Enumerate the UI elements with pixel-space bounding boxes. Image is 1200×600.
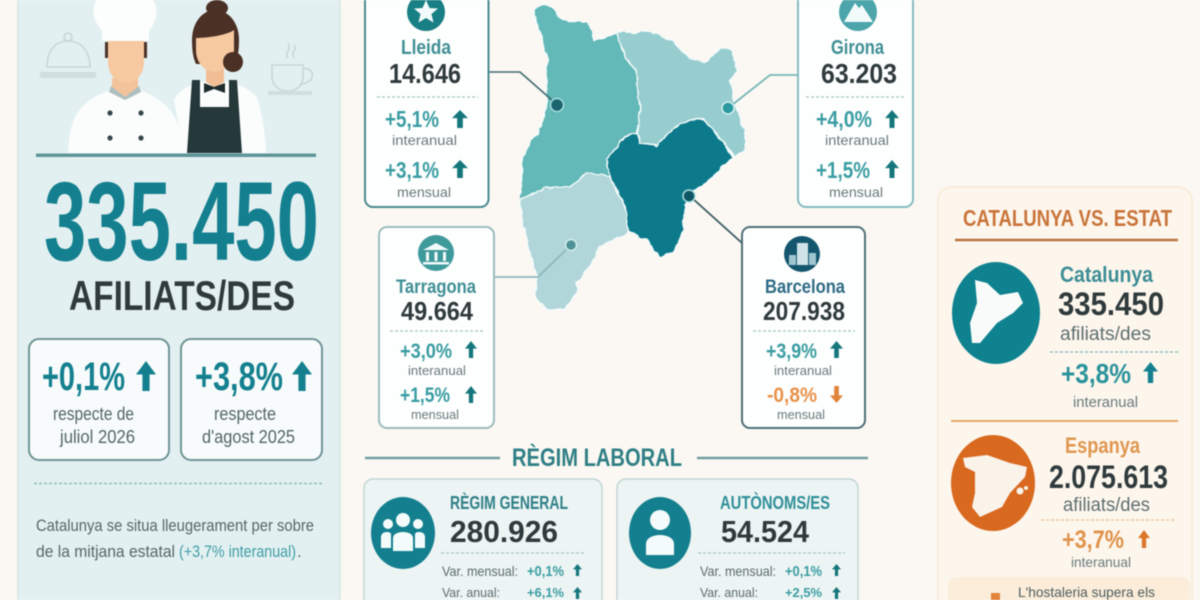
- subtitle: AFILIATS/DES: [69, 272, 295, 319]
- card: Tarragona: 49.664: [401, 296, 473, 326]
- stats: Espanya: [1041, 433, 1176, 570]
- card: Autònoms: Var. anual:: [700, 585, 758, 600]
- stats: Catalunya: Catalunya: [1060, 262, 1154, 287]
- stats: Espanya: 2.075.613: [1049, 459, 1168, 495]
- card: monthly change: [29, 339, 169, 460]
- panel: total afiliats: [18, 0, 340, 600]
- card: monthly change: +0,1%: [42, 355, 125, 399]
- card: Lleida: Lleida: [401, 37, 452, 59]
- connector: Girona: [722, 75, 798, 114]
- card: Autònoms: AUTÒNOMS/ES: [720, 492, 830, 513]
- stats: Catalunya: afiliats/des: [1060, 324, 1151, 345]
- card: Autònoms: 54.524: [721, 514, 810, 549]
- stats: Catalunya: +3,8%: [1061, 358, 1131, 389]
- icon: mountain: [839, 0, 877, 31]
- card: Barcelona: -0,8%: [767, 384, 817, 407]
- card: annual change: [181, 339, 322, 460]
- card: Lleida: 14.646: [389, 58, 461, 89]
- card: Barcelona: Barcelona: [765, 277, 845, 298]
- card: annual change: respecte: [214, 404, 276, 424]
- region: Girona: [617, 32, 745, 157]
- card: monthly change: respecte de: [53, 404, 134, 424]
- note text: [36, 516, 314, 561]
- card: Tarragona: mensual: [411, 407, 459, 422]
- card: Autònoms: +2,5%: [785, 585, 822, 600]
- card: Règim general: 280.926: [450, 514, 558, 549]
- card: Lleida: [365, 0, 488, 207]
- card: Girona: [798, 0, 913, 207]
- callout: [948, 577, 1190, 600]
- icon: group of people: [371, 497, 435, 569]
- card: Barcelona: mensual: [777, 407, 825, 422]
- stats: Espanya: afiliats/des: [1063, 495, 1150, 516]
- illustration: chef: [68, 0, 185, 153]
- card: Girona: 63.203: [821, 58, 897, 89]
- card: Tarragona: +3,0%: [400, 340, 452, 363]
- card: Barcelona: interanual: [774, 363, 832, 378]
- card: Barcelona: [742, 227, 865, 428]
- card: Règim general: Var. mensual:: [442, 563, 518, 579]
- map of Catalonia: [520, 4, 745, 310]
- card: Règim general: +0,1%: [527, 563, 564, 580]
- card: Girona: +4,0%: [816, 106, 872, 132]
- icon: cloche: [40, 33, 96, 78]
- icon: coffee cup: [268, 43, 312, 95]
- card: annual change: d'agost 2025: [202, 427, 295, 447]
- illustration: waitress: [174, 0, 266, 153]
- region: Tarragona: [520, 173, 628, 310]
- icon: Catalonia map: [952, 262, 1040, 364]
- card: Tarragona: +1,5%: [400, 384, 450, 407]
- card: Lleida: +5,1%: [385, 106, 439, 132]
- stats: Catalunya: [1050, 262, 1178, 411]
- card: Autònoms: +0,1%: [785, 563, 822, 580]
- icon: star: [407, 0, 445, 31]
- card: Lleida: interanual: [392, 132, 457, 148]
- connector: Barcelona: [683, 190, 742, 243]
- note text: de la mitjana estatal: [36, 542, 175, 561]
- card: Barcelona: +3,9%: [766, 340, 817, 363]
- region: Lleida: [520, 4, 640, 200]
- card: Girona: interanual: [825, 132, 889, 148]
- card: Lleida: +3,1%: [385, 157, 439, 183]
- stats: Catalunya: interanual: [1073, 394, 1138, 411]
- card: Girona: Girona: [831, 37, 885, 59]
- card: Girona: mensual: [829, 184, 883, 200]
- card: Règim general: Var. anual:: [442, 585, 500, 600]
- card: Lleida: mensual: [397, 184, 451, 200]
- card: Barcelona: 207.938: [763, 296, 845, 326]
- big number: 335.450: [44, 159, 319, 284]
- card: Règim general: RÈGIM GENERAL: [450, 492, 568, 513]
- card: Tarragona: [379, 227, 494, 428]
- heading: Règim laboral: RÈGIM LABORAL: [512, 443, 682, 472]
- stats: Catalunya: 335.450: [1058, 286, 1164, 322]
- card: Autònoms: [617, 479, 858, 600]
- icon: classical building: [418, 235, 454, 271]
- card: Tarragona: interanual: [408, 363, 466, 378]
- card: Tarragona: Tarragona: [396, 277, 476, 298]
- icon: city buildings: [784, 236, 820, 272]
- stats: Espanya: Espanya: [1065, 433, 1141, 458]
- card: Girona: +1,5%: [816, 157, 870, 183]
- stats: Espanya: +3,7%: [1062, 526, 1124, 554]
- icon: Spain map: [951, 435, 1035, 531]
- card: Autònoms: Var. mensual:: [700, 563, 776, 579]
- note text: Catalunya se situa lleugerament per sobre: [36, 516, 314, 535]
- icon: person: [629, 497, 691, 569]
- callout: L'hostaleria supera els: [1018, 584, 1155, 600]
- note text: (+3,7% interanual): [179, 542, 296, 561]
- card: Règim general: +6,1%: [527, 585, 564, 600]
- stats: Espanya: interanual: [1071, 554, 1131, 570]
- region: Barcelona: [607, 118, 733, 258]
- panel: Catalunya vs. Estat: [938, 187, 1192, 600]
- card: monthly change: juliol 2026: [59, 427, 135, 447]
- card: Règim general: [364, 479, 602, 600]
- card: annual change: +3,8%: [195, 355, 283, 399]
- note text: .: [297, 542, 302, 561]
- connector: Tarragona: [494, 240, 576, 277]
- connector: Lleida: [489, 72, 564, 112]
